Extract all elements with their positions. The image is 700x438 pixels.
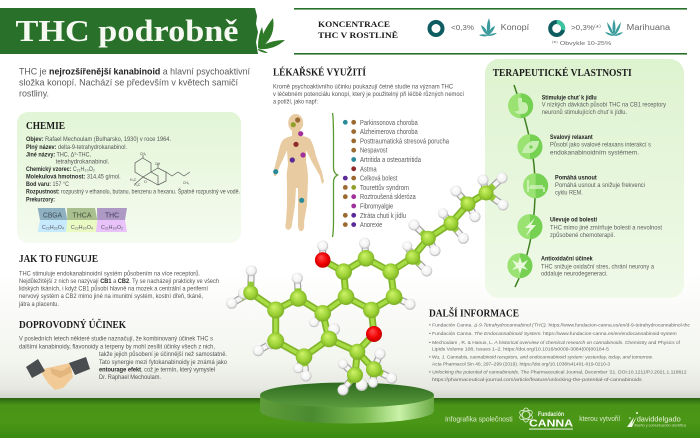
how it works text: Nejdůležitější z nich se nazývají CB1 a CB2. Ty se nacházejí prakticky ve všech	[19, 277, 219, 285]
panel: chemistry	[17, 112, 241, 243]
logo: Fundación Canna: Fundación	[538, 412, 564, 418]
chemistry facts: Plný název: delta-9-tetrahydrokanabinol.	[26, 144, 127, 151]
header: concentration strip: >0,3%⁽*⁾	[571, 23, 601, 32]
intro text: THC je nejrozšířenější kanabinoid a hlavní psychoaktivní	[19, 66, 250, 76]
entourage text: Tato synergie mezi fytokanabinoidy je známá jako	[99, 359, 227, 366]
heading: medical uses: LÉKAŘSKÉ VYUŽITÍ	[273, 67, 366, 79]
heading: further information: DALŠÍ INFORMACE	[429, 307, 519, 320]
benefit: antioxidant: oddaluje neurodegeneraci.	[541, 271, 608, 278]
icon: donut under 0.3	[430, 22, 442, 35]
benefit: muscle relaxant: Svalový relaxant	[550, 134, 593, 141]
heading: concentration: THC V ROSTLINĚ	[318, 30, 398, 40]
chart: precursors: THCA	[72, 210, 92, 220]
header: concentration strip: Konopí	[501, 23, 530, 32]
footer text: created by: kterou vytvořil	[579, 416, 620, 423]
entourage text: takže jejich působení je účinnější než samostatně.	[99, 350, 227, 358]
benefit: pain relief: THC mimo jiné zmírňuje bolesti a nevolnost	[550, 225, 662, 232]
entourage text	[19, 336, 227, 381]
list of conditions: Fibromyalgie	[360, 204, 393, 210]
header: concentration strip	[294, 8, 687, 55]
benefit: pain relief: Ulevuje od bolesti	[550, 217, 597, 224]
hydrogen atoms	[226, 172, 508, 396]
list of conditions: Nespavost	[360, 148, 387, 155]
chart: precursors: THC	[105, 210, 119, 220]
logo: Fundación Canna: CANNA	[529, 418, 573, 430]
how it works text: THC stimuluje endokanabinoidní systém působením na více receptorů.	[19, 269, 200, 277]
bracket	[332, 113, 338, 237]
benefit: appetite: neuronů stimulujících chuť k jídlu.	[542, 108, 627, 116]
intro text: rostliny.	[19, 88, 49, 98]
logo: daviddelgado: daviddelgado	[637, 415, 681, 424]
benefit: muscle relaxant: Působí jako svalové relaxans interakcí s	[550, 140, 651, 148]
heading: therapeutic properties: TERAPEUTICKÉ VLASTNOSTI	[493, 67, 632, 79]
icon: antioxidant spark	[508, 253, 532, 278]
section: how it works	[18, 254, 219, 308]
references: • Fundación Canna. Δ-9-Tetrahydrocannabinol (THC). https://www.fundacion-canna.es/en/d-9-tetrahydrocannabinol-thc	[429, 323, 691, 329]
chart: THC structural formula: CH₃	[183, 181, 190, 185]
logo: daviddelgado	[627, 412, 686, 428]
carbon atoms	[243, 186, 494, 383]
benefit: sleep	[555, 174, 645, 197]
platform under molecule	[260, 382, 434, 424]
entourage text: entourage efekt, což je termín, který vymyslel	[99, 367, 215, 374]
chemistry facts: Prekurzory:	[26, 197, 55, 204]
references: • Unlocking the potential of cannabinoids. The Pharmaceutical Journal, December '21. DOI:10.1211/PJ.2021.1.119612	[429, 370, 687, 376]
stem	[514, 85, 535, 287]
entourage text: dalšími kanabinoidy, flavonoidy a terpeny by mohl zesílit účinky všech z nich,	[19, 343, 215, 350]
list of conditions: Anorexie	[360, 222, 382, 229]
icon: muscle	[518, 134, 542, 159]
oxygen atoms	[315, 252, 382, 342]
chemistry facts: Rozpustnost: rozpustný v ethanolu, butanu, benzenu a hexanu. Špatně rozpustný ve vodě.	[26, 187, 240, 196]
benefit: pain relief	[550, 217, 662, 239]
benefit: antioxidant: THC snižuje oxidační stres, chrání neurony a	[541, 263, 654, 270]
references	[429, 323, 691, 383]
benefit: appetite: Stimuluje chuť k jídlu	[542, 94, 597, 101]
heading: chemistry: CHEMIE	[26, 120, 65, 132]
intro text	[19, 66, 250, 98]
entourage text: V posledních letech některé studie naznačují, že kombinovaný účinek THC s	[19, 336, 213, 343]
benefit: muscle relaxant	[550, 134, 651, 156]
footer band	[0, 398, 700, 438]
references: • Mechoulam , R. & Hanus, L. A historical overview of chemical research on cannabinoids. Chemistry and Physics of	[429, 340, 681, 346]
icon: stomach	[508, 93, 533, 118]
medical uses intro: v léčebném potenciálu konopí, který je použitelný při léčbě různých nemocí	[273, 90, 464, 98]
hydrogen bonds	[232, 178, 503, 390]
benefit: antioxidant	[541, 255, 654, 278]
icon: handshake	[26, 357, 90, 390]
chart: THC structural formula: H₃C	[134, 183, 141, 187]
benefit: muscle relaxant: endokanabinoidním systémem.	[550, 149, 639, 156]
header: concentration strip: Marihuana	[627, 23, 671, 32]
footer credit text: Infografika společnosti	[445, 417, 513, 424]
benefit: sleep: cyklu REM.	[555, 190, 583, 197]
logo: Fundación Canna	[518, 408, 573, 430]
chart: precursors	[38, 208, 127, 232]
medical uses intro	[273, 83, 464, 105]
icon: hemp leaf	[479, 18, 497, 36]
chart: THC structural formula: H₃C	[130, 178, 137, 182]
benefit: sleep: Pomáhá usnout	[555, 174, 597, 181]
list of conditions: Posttraumatická stresová porucha	[360, 138, 449, 145]
list of conditions	[343, 120, 449, 229]
section: further information	[429, 307, 691, 383]
how it works text: lidských tkáních, i když CB1 působí hlavně na mozek a centrální a periferní	[19, 284, 208, 292]
heading: entourage effect: DOPROVODNÝ ÚČINEK	[19, 318, 127, 331]
list of conditions: Celková bolest	[360, 176, 397, 183]
panel: therapeutic properties	[485, 59, 684, 298]
title banner: THC podrobně	[16, 13, 238, 48]
section: medical uses	[273, 67, 464, 237]
header: concentration strip: <0,3%	[451, 23, 474, 32]
benefit: antioxidant: Antioxidační účinek	[541, 255, 593, 262]
references: https://pharmaceutical-journal.com/article/feature/unlocking-the-potential-of-cannabinoids	[432, 377, 642, 383]
section: entourage effect	[19, 318, 227, 390]
chemistry facts	[26, 136, 240, 204]
how it works text: nervový systém a CB2 mimo jiné na imunitní systém, kostní dřeň, tkáně,	[19, 293, 203, 300]
icon: marijuana leaf	[605, 19, 623, 36]
list of conditions: Alzheimerova choroba	[360, 129, 418, 136]
footnote: ⁽*⁾ Obvykle 10-25%	[552, 40, 611, 47]
carbon bonds	[251, 193, 486, 375]
list of conditions: Roztroušená skleróza	[360, 194, 416, 201]
chart: THC structural formula: OH	[155, 162, 161, 166]
heading: concentration: KONCENTRACE	[318, 20, 390, 29]
title banner	[0, 8, 258, 54]
chemistry facts: Chemický vzorec: C₂₁H₃₀O₂	[26, 166, 95, 173]
list of conditions: Ztráta chuti k jídlu	[360, 213, 406, 220]
molecule: THC ball-and-stick model	[226, 172, 508, 396]
chart: THC structural formula: CH₃	[140, 152, 147, 156]
medical uses intro: Kromě psychoaktivního účinku poukazují četné studie na význam THC	[273, 83, 453, 90]
references: • Wu, J. Cannabis, cannabinoid receptors, and endocannabinoid system: yesterday, today, and tomorrow.	[429, 355, 653, 361]
heading: how it works: JAK TO FUNGUJE	[19, 254, 98, 265]
icon: bed	[523, 173, 548, 198]
icon: cannabis leaf by title	[258, 18, 285, 53]
chemistry facts: Bod varu: 157 °C	[26, 180, 69, 188]
medical uses intro: a potíží, jako např:	[273, 98, 318, 105]
heading: concentration	[318, 20, 398, 40]
chemistry facts: Molekulová hmotnost: 314,45 g/mol.	[26, 174, 121, 180]
icon: donut over 0.3	[550, 22, 563, 35]
entourage text: Dr. Raphael Mechoulam.	[99, 374, 161, 381]
chart: precursors: CBGA	[43, 210, 63, 220]
references: Lipids Volume 108, Issues 1–2. https://doi.org/10.1016/s0009-3084(00)00184-5	[432, 346, 609, 352]
chart: precursors: C₂₁H₃₀O₂	[101, 225, 123, 231]
chart: THC structural formula	[130, 152, 190, 187]
references: Acta Pharmacol Sin 40, 297–299 (2019). https://doi.org/10.1038/s41401-019-0210-3	[432, 361, 610, 367]
list of conditions: Artritida a osteoartritida	[360, 157, 421, 164]
chart: precursors: C₂₂H₃₀O₄	[71, 225, 94, 231]
references: • Fundación Canna. The Endocannabinoid System. https://www.fundacion-canna.es/en/endocannabinoid-system	[429, 331, 677, 337]
how it works text	[18, 269, 219, 308]
list of conditions: Parkinsonova choroba	[360, 120, 418, 127]
chemistry facts: tetrahydrokanabinol.	[56, 159, 109, 166]
benefit: appetite	[542, 94, 667, 116]
benefit: pain relief: způsobené chemoterapií.	[550, 231, 615, 239]
benefit: appetite: V nízkých dávkách působí THC na CB1 receptory	[542, 100, 667, 108]
icon: lightning	[518, 214, 542, 239]
chemistry facts: Objev: Rafael Mechoulam (Bulharsko, 1930) v roce 1964.	[26, 136, 171, 143]
list of conditions: Tourettův syndrom	[360, 184, 409, 192]
list of conditions: Astma	[360, 166, 377, 173]
logo: daviddelgado: diseño y comunicación científica	[634, 424, 686, 428]
chart: precursors: C₂₂H₃₂O₄	[42, 225, 65, 231]
intro text: složka konopí. Nachází se především v květech samičí	[19, 76, 238, 88]
icon: human body with markers	[273, 114, 324, 231]
chemistry facts: Jiné názvy: THC, Δ⁹-THC,	[26, 151, 91, 158]
how it works text: játra a placentu.	[18, 301, 59, 308]
benefit: sleep: Pomáhá usnout a snižuje frekvenci	[555, 182, 645, 189]
chart: THC structural formula: O	[144, 180, 147, 184]
